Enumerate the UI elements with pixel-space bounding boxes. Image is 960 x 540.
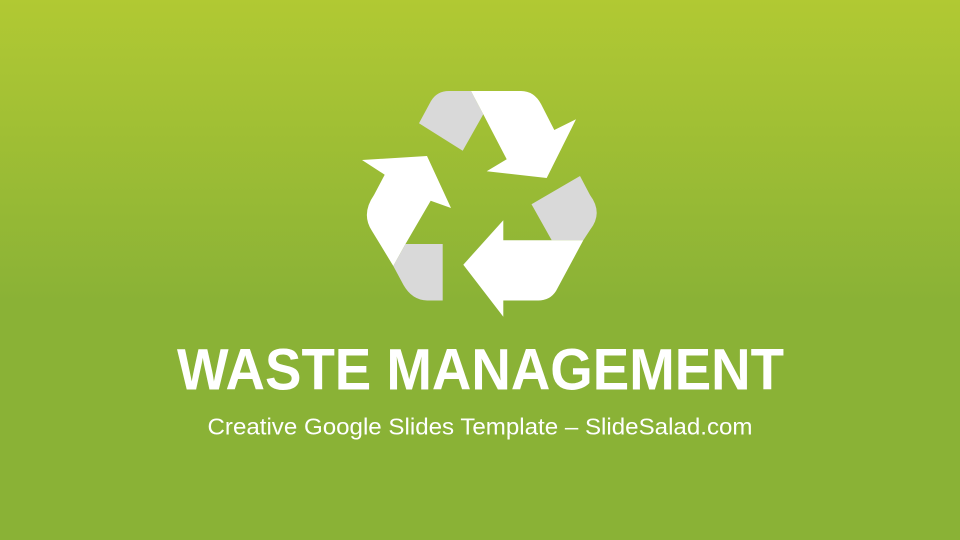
title: WASTE MANAGEMENT (177, 337, 784, 402)
arrow: bottom segment head (463, 220, 583, 317)
subtitle: Creative Google Slides Template – SlideSalad.com (208, 414, 752, 440)
arrow: left segment head (362, 156, 451, 266)
arrow: left segment tail (393, 244, 443, 300)
arrow: top segment tail (419, 91, 483, 151)
icon: recycling symbol (362, 91, 597, 317)
arrow: right segment tail (532, 176, 597, 240)
arrow: top segment head (471, 91, 576, 178)
